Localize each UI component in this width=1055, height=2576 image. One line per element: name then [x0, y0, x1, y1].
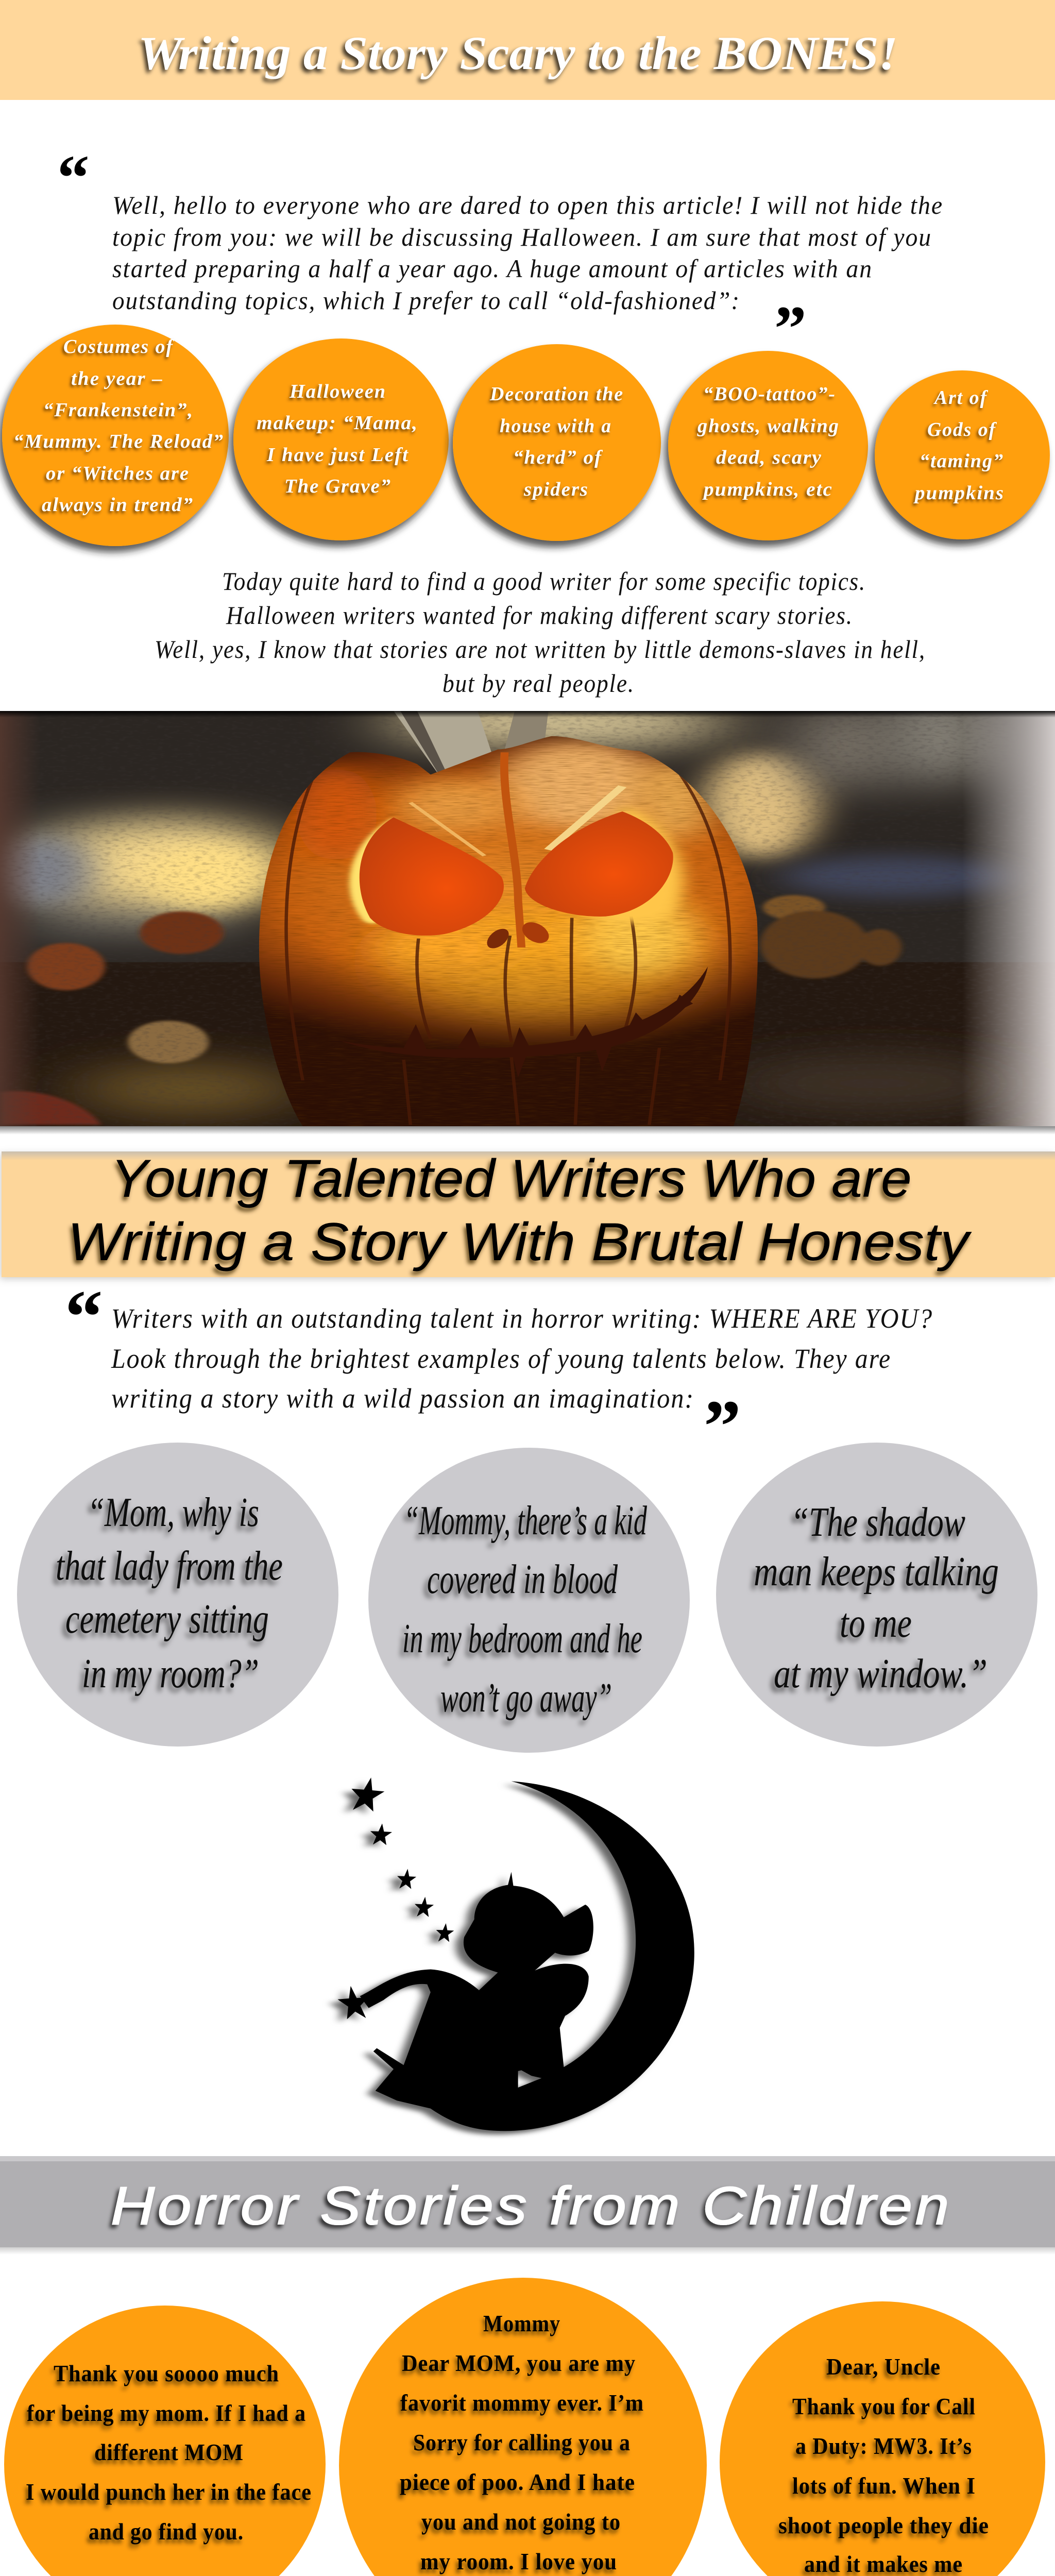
intro paragraph: started preparing a half a year ago. A huge amount of articles with an	[112, 254, 873, 283]
oval: costumes	[2, 325, 229, 546]
oval: taming pumpkins: Gods of	[927, 419, 997, 440]
heading	[67, 1149, 972, 1272]
stem pieces	[394, 711, 498, 777]
oval: decoration: spiders	[523, 479, 589, 500]
oval: letter three: Dear, Uncle	[826, 2353, 941, 2380]
oval: lady from the cemetery: that lady from the	[56, 1544, 283, 1589]
oval: lady from the cemetery: in my room?”	[82, 1651, 259, 1697]
oval: letter two: Dear MOM, you are my	[402, 2350, 636, 2376]
oval: costumes: Costumes of	[63, 336, 174, 358]
nostrils	[487, 928, 509, 948]
intro paragraph: outstanding topics, which I prefer to call “old-fashioned”:	[112, 286, 740, 315]
section banner: young writers	[2, 1149, 1055, 1277]
oval: lady from the cemetery	[17, 1443, 338, 1747]
oval: letter three	[720, 2301, 1045, 2576]
header band	[0, 0, 1055, 100]
oval: letter three: a Duty: MW3. It’s	[795, 2433, 972, 2459]
pumpkin body	[256, 735, 767, 1126]
eyes	[349, 818, 397, 924]
oval: letter three: Thank you for Call	[792, 2393, 976, 2419]
oval: shadow man	[716, 1443, 1037, 1747]
small background pumpkins	[0, 895, 901, 1125]
pumpkin ribs	[286, 764, 730, 1125]
oval: decoration	[453, 344, 661, 541]
oval: tattoo: dead, scary	[716, 447, 822, 468]
oval: taming pumpkins	[875, 370, 1050, 539]
oval: costumes: the year –	[71, 368, 163, 389]
oval: letter two: my room. I love you	[420, 2548, 617, 2574]
intro paragraph: Well, hello to everyone who are dared to open this article! I will not hide the	[112, 191, 943, 219]
oval: decoration: Decoration the	[489, 383, 624, 405]
oval: kid covered in blood: covered in blood	[427, 1557, 618, 1602]
grey quote ovals	[17, 1443, 1037, 1753]
oval: letter two: piece of poo. And I hate	[400, 2469, 635, 2495]
intro quote block	[57, 143, 943, 365]
oval: kid covered in blood: “Mommy, there’s a kid	[404, 1498, 648, 1544]
icon: fairy sitting on crescent moon with stars	[335, 1776, 694, 2131]
oval: letter two: Mommy	[483, 2310, 560, 2336]
paragraph: Look through the brightest examples of young talents below. They are	[111, 1343, 891, 1374]
heading: Writing a Story With Brutal Honesty	[67, 1212, 972, 1272]
oval: tattoo: ghosts, walking	[697, 415, 840, 437]
closing quote mark: ”	[774, 294, 807, 365]
oval: letter one: Thank you soooo much	[54, 2360, 279, 2386]
oval: shadow man: “The shadow	[791, 1500, 965, 1545]
orange topic ovals	[2, 325, 1050, 546]
intro paragraph: topic from you: we will be discussing Halloween. I am sure that most of you	[112, 223, 932, 251]
oval: letter three: lots of fun. When I	[792, 2472, 976, 2499]
young writers quote block	[65, 1275, 933, 1468]
paragraph: writing a story with a wild passion an imagination:	[111, 1383, 694, 1414]
oval: makeup: The Grave”	[284, 476, 392, 497]
oval: letter one: different MOM	[94, 2439, 244, 2465]
oval: lady from the cemetery: cemetery sitting	[65, 1597, 269, 1642]
paragraph: Writers with an outstanding talent in horror writing: WHERE ARE YOU?	[111, 1303, 933, 1334]
oval: makeup: makeup: “Mama,	[257, 412, 418, 434]
closing quote mark: ”	[704, 1385, 741, 1468]
oval: letter one: for being my mom. If I had a	[27, 2400, 306, 2426]
oval: costumes: “Mummy. The Reload”	[13, 431, 224, 452]
oval: decoration: house with a	[500, 415, 612, 437]
oval: costumes: or “Witches are	[46, 463, 190, 484]
oval: lady from the cemetery: “Mom, why is	[88, 1490, 259, 1535]
oval: letter one: and go find you.	[89, 2518, 244, 2545]
oval: shadow man: to me	[840, 1601, 912, 1646]
oval: letter two: Sorry for calling you a	[413, 2429, 631, 2455]
paragraph	[111, 1303, 933, 1414]
oval: tattoo	[668, 351, 868, 540]
centered paragraph: but by real people.	[443, 669, 635, 698]
opening quote mark: “	[57, 143, 90, 214]
oval: kid covered in blood: won’t go away”	[440, 1675, 612, 1721]
oval: kid covered in blood	[368, 1448, 690, 1753]
oval: kid covered in blood: in my bedroom and he	[402, 1616, 642, 1662]
oval: letter one	[4, 2306, 326, 2576]
oval: makeup	[233, 338, 449, 540]
oval: letter three: shoot people they die	[778, 2512, 989, 2538]
stars	[347, 1776, 387, 1812]
opening quote mark: “	[65, 1275, 103, 1359]
centered paragraph: Today quite hard to find a good writer for some specific topics.	[222, 567, 866, 596]
oval: costumes: “Frankenstein”,	[43, 399, 194, 421]
image: glowing jack-o-lantern	[0, 682, 1055, 1134]
oval: makeup: Halloween	[289, 381, 386, 402]
heading: Horror Stories from Children	[111, 2176, 952, 2236]
oval: taming pumpkins: Art of	[933, 387, 988, 409]
oval: shadow man: at my window.”	[774, 1651, 988, 1697]
brow ridges	[548, 786, 622, 850]
oval: tattoo: pumpkins, etc	[702, 479, 833, 500]
oval: taming pumpkins: pumpkins	[913, 482, 1005, 504]
orange letters ovals	[4, 2278, 1045, 2576]
oval: tattoo: “BOO-tattoo”-	[703, 383, 836, 405]
section banner: horror stories from children	[0, 2156, 1055, 2255]
oval: letter two: you and not going to	[421, 2509, 621, 2535]
centered paragraph	[155, 567, 926, 698]
oval: shadow man: man keeps talking	[754, 1549, 999, 1595]
intro paragraph	[112, 191, 943, 315]
oval: decoration: “herd” of	[513, 447, 603, 468]
oval: costumes: always in trend”	[42, 494, 194, 516]
top highlights	[498, 740, 659, 829]
glow below the eyes	[397, 900, 693, 1024]
oval: letter two: favorit mommy ever. I’m	[400, 2389, 644, 2416]
oval: makeup: I have just Left	[266, 444, 409, 466]
centered paragraph: Well, yes, I know that stories are not written by little demons-slaves in hell,	[155, 635, 926, 664]
heading: Young Talented Writers Who are	[111, 1149, 912, 1209]
oval: letter two	[339, 2278, 707, 2576]
centered paragraph: Halloween writers wanted for making different scary stories.	[226, 601, 853, 630]
main title: Writing a Story Scary to the BONES!	[138, 27, 898, 79]
oval: taming pumpkins: “taming”	[920, 450, 1004, 472]
oval: letter one: I would punch her in the face	[26, 2479, 312, 2505]
mouth	[340, 967, 708, 1077]
